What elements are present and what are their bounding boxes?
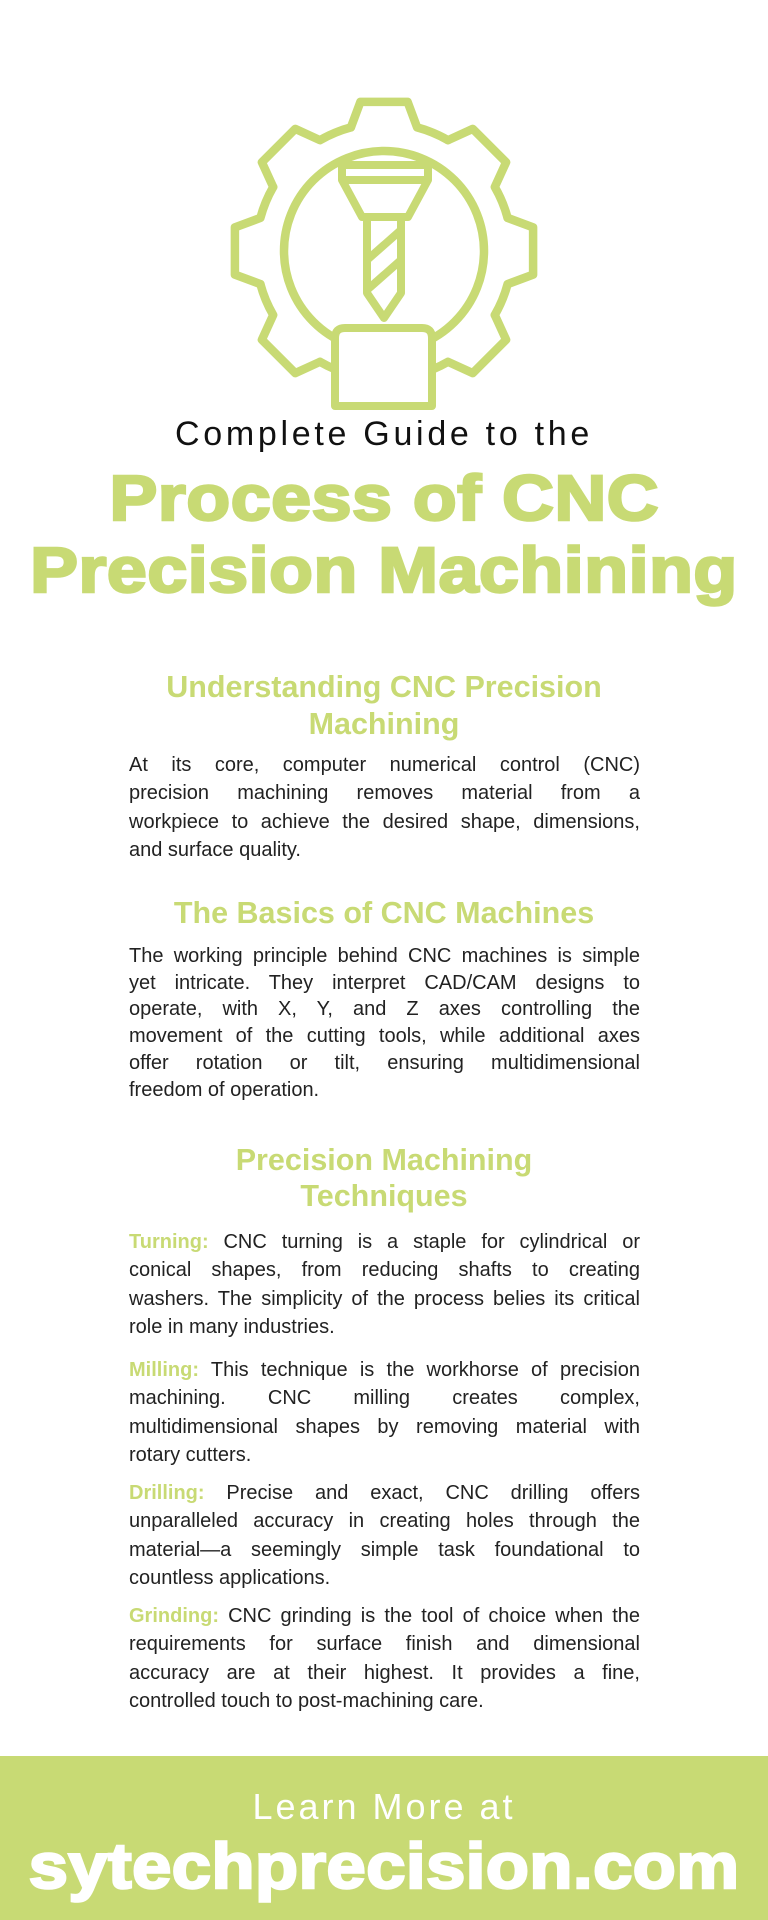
text: milling: rotary cutters. bbox=[129, 1444, 251, 1466]
text: drilling: unparalleled accuracy in creating holes through the bbox=[129, 1510, 640, 1532]
text: turning bbox=[129, 1231, 640, 1338]
icon: gear with drill bbox=[230, 98, 538, 410]
subtitle: Complete Guide to the bbox=[175, 415, 593, 453]
footer: learn more: Learn More at bbox=[252, 1786, 516, 1827]
heading: understanding: Understanding CNC Precision bbox=[166, 670, 602, 704]
text: milling: multidimensional shapes by removing material with bbox=[129, 1416, 640, 1438]
text: basics: offer rotation or tilt, ensuring multidimensional bbox=[129, 1052, 640, 1074]
heading: techniques bbox=[236, 1143, 532, 1213]
footer banner bbox=[0, 1756, 768, 1920]
heading: techniques: Precision Machining bbox=[236, 1143, 532, 1177]
heading: techniques: Techniques bbox=[300, 1179, 468, 1213]
text: drilling: Drilling: Precise and exact, CNC drilling offers bbox=[129, 1482, 640, 1504]
text: turning: washers. The simplicity of the process belies its critical bbox=[129, 1288, 640, 1310]
text: basics: movement of the cutting tools, while additional axes bbox=[129, 1025, 640, 1047]
text: basics: freedom of operation. bbox=[129, 1079, 319, 1101]
text: basics: yet intricate. They interpret CAD/CAM designs to bbox=[129, 972, 640, 994]
text: drilling: material—a seemingly simple task foundational to bbox=[129, 1539, 640, 1561]
text: basics: operate, with X, Y, and Z axes controlling the bbox=[129, 998, 640, 1020]
text: basics bbox=[129, 945, 640, 1101]
text: grinding: requirements for surface finish and dimensional bbox=[129, 1633, 640, 1655]
title line 2: Precision Machining bbox=[30, 534, 738, 606]
text: grinding: controlled touch to post-machining care. bbox=[129, 1690, 484, 1712]
text: milling: machining. CNC milling creates complex, bbox=[129, 1387, 640, 1409]
text: drilling bbox=[129, 1482, 640, 1589]
text: understanding: precision machining removes material from a bbox=[129, 782, 640, 804]
text: turning: conical shapes, from reducing shafts to creating bbox=[129, 1259, 640, 1281]
text: basics: The working principle behind CNC machines is simple bbox=[129, 945, 640, 967]
text: understanding bbox=[129, 754, 640, 861]
text: milling: Milling: This technique is the workhorse of precision bbox=[129, 1359, 640, 1381]
title line 1: Process of CNC bbox=[109, 462, 659, 534]
heading: understanding: Machining bbox=[309, 707, 459, 741]
text: grinding: accuracy are at their highest. It provides a fine, bbox=[129, 1662, 640, 1684]
text: turning: role in many industries. bbox=[129, 1316, 335, 1338]
text: grinding bbox=[129, 1605, 640, 1712]
text: grinding: Grinding: CNC grinding is the tool of choice when the bbox=[129, 1605, 640, 1627]
heading: understanding bbox=[166, 670, 602, 741]
text: milling bbox=[129, 1359, 640, 1466]
heading: basics: The Basics of CNC Machines bbox=[174, 896, 594, 930]
text: understanding: workpiece to achieve the desired shape, dimensions, bbox=[129, 811, 640, 833]
text: turning: Turning: CNC turning is a staple for cylindrical or bbox=[129, 1231, 640, 1253]
text: understanding: and surface quality. bbox=[129, 839, 301, 861]
text: understanding: At its core, computer numerical control (CNC) bbox=[129, 754, 640, 776]
text: drilling: countless applications. bbox=[129, 1567, 330, 1589]
footer: url: sytechprecision.com bbox=[29, 1830, 739, 1902]
